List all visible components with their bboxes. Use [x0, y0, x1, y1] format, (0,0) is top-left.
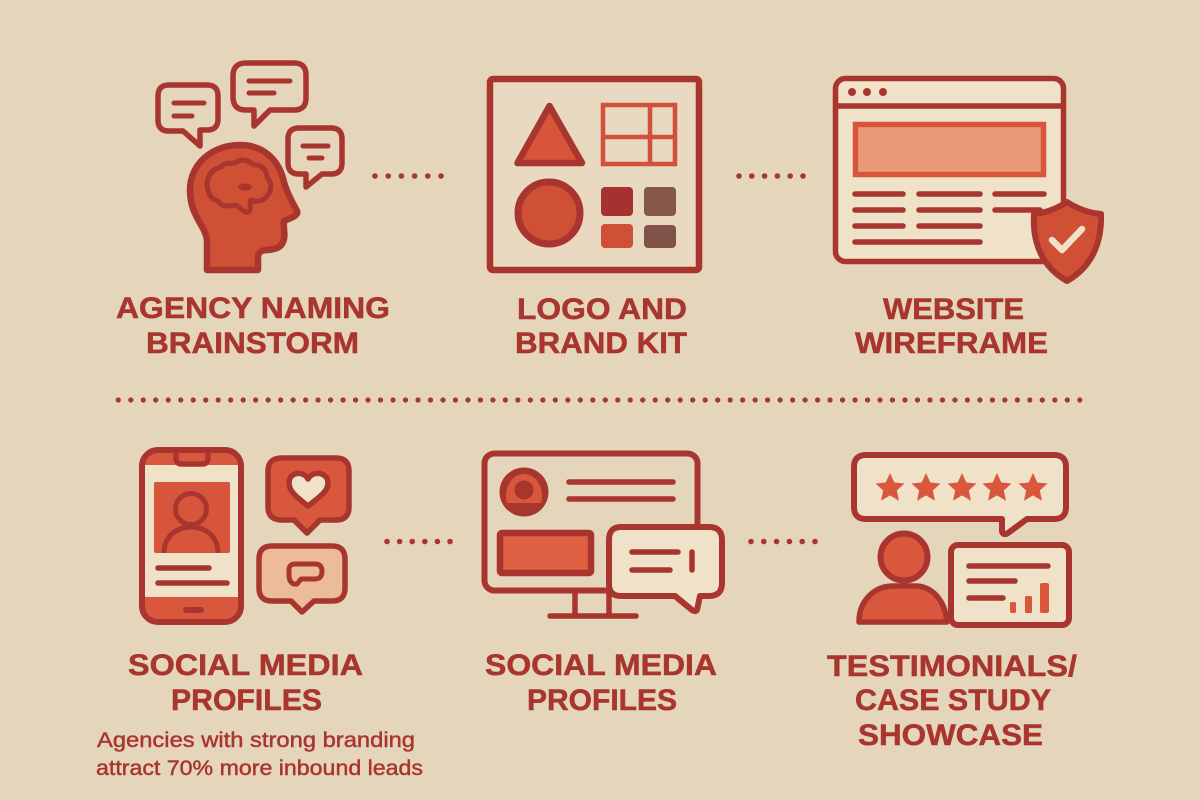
- label: testimonials case study showcase: TESTIMONIALS/: [827, 650, 1078, 683]
- panel: logo and brand kit: [490, 79, 699, 360]
- icon: monitor with chat bubble: [484, 454, 722, 616]
- grid swatch: [603, 105, 675, 164]
- icon: brand kit board: [490, 79, 699, 270]
- label: website wireframe: WEBSITE: [883, 293, 1024, 326]
- label: testimonials case study showcase: [827, 650, 1078, 752]
- speech bubble right: [288, 128, 342, 187]
- statistic note: Agencies with strong branding: [97, 729, 415, 752]
- person head: [880, 534, 928, 580]
- brain fold: [238, 184, 252, 190]
- speech bubble left: [158, 85, 218, 146]
- label: website wireframe: WIREFRAME: [855, 327, 1048, 360]
- comment glyph: [289, 564, 322, 584]
- connector: dotted line 2: [739, 173, 805, 179]
- avatar circle: [500, 468, 548, 516]
- panel: agency naming brainstorm: [116, 63, 390, 360]
- label: testimonials case study showcase: SHOWCASE: [858, 719, 1043, 752]
- icon: phone with reaction bubbles: [142, 450, 349, 622]
- label: social media profiles: SOCIAL MEDIA: [485, 649, 717, 682]
- label: social media profiles: PROFILES: [171, 684, 322, 717]
- phone text lines: [158, 568, 227, 583]
- chat bubble: [609, 527, 722, 611]
- profile photo: [154, 482, 230, 553]
- label: logo and brand kit: LOGO AND: [517, 293, 687, 326]
- hero block: [856, 124, 1044, 174]
- comment bubble: [259, 546, 345, 612]
- review bubble: [854, 455, 1066, 534]
- heart: [289, 473, 328, 506]
- browser dots: [848, 88, 887, 96]
- panel: social media profiles (phone): [96, 450, 423, 780]
- connector: dotted line 1: [375, 173, 442, 179]
- circle: [518, 182, 580, 244]
- chat text lines: [632, 552, 692, 570]
- label: social media profiles: SOCIAL MEDIA: [128, 649, 363, 682]
- text lines: [855, 194, 1044, 242]
- label: social media profiles: [485, 649, 717, 717]
- board frame: [490, 79, 699, 270]
- phone body: [142, 450, 241, 622]
- colour swatches: [601, 187, 676, 248]
- report text lines: [969, 566, 1048, 598]
- shield with check: [1034, 202, 1101, 281]
- speech bubble top: [233, 63, 306, 126]
- phone screen: [145, 465, 238, 597]
- profile person: [164, 494, 218, 553]
- monitor frame: [484, 454, 698, 590]
- label: agency naming brainstorm: AGENCY NAMING: [116, 292, 390, 325]
- person body: [859, 586, 947, 622]
- label: logo and brand kit: [515, 293, 687, 360]
- head silhouette: [190, 145, 297, 270]
- divider: horizontal dotted line: [118, 397, 1081, 403]
- brain outline: [207, 160, 271, 212]
- profile text lines: [569, 482, 673, 499]
- label: social media profiles: [128, 649, 363, 717]
- browser title divider: [836, 103, 1063, 109]
- connector: dotted line 3: [387, 539, 451, 544]
- label: agency naming brainstorm: [116, 292, 390, 360]
- connector: dotted line 4: [751, 539, 816, 544]
- browser window: [836, 78, 1064, 262]
- home button: [186, 607, 201, 613]
- label: agency naming brainstorm: BRAINSTORM: [146, 327, 359, 360]
- panel: testimonials and case study showcase: [827, 455, 1078, 752]
- icon: reviewer with stars and report: [854, 455, 1069, 625]
- five stars: [876, 473, 1048, 501]
- speech bubble lines: [174, 81, 328, 158]
- icon: head with brain and speech bubbles: [158, 63, 342, 270]
- label: testimonials case study showcase: CASE STUDY: [855, 684, 1051, 717]
- panel: social media profiles (monitor): [484, 454, 722, 717]
- statistic note: [96, 729, 423, 780]
- triangle: [518, 106, 582, 163]
- statistic note: attract 70% more inbound leads: [96, 757, 423, 780]
- banner block: [500, 533, 591, 573]
- label: social media profiles: PROFILES: [527, 684, 677, 717]
- report card: [951, 545, 1069, 625]
- label: logo and brand kit: BRAND KIT: [515, 327, 687, 360]
- icon: browser wireframe with shield: [836, 78, 1101, 281]
- heart bubble: [268, 458, 349, 533]
- phone notch: [176, 452, 208, 464]
- label: website wireframe: [855, 293, 1048, 360]
- monitor stand: [550, 593, 636, 616]
- report bars: [1010, 583, 1049, 613]
- panel: website wireframe: [836, 78, 1101, 360]
